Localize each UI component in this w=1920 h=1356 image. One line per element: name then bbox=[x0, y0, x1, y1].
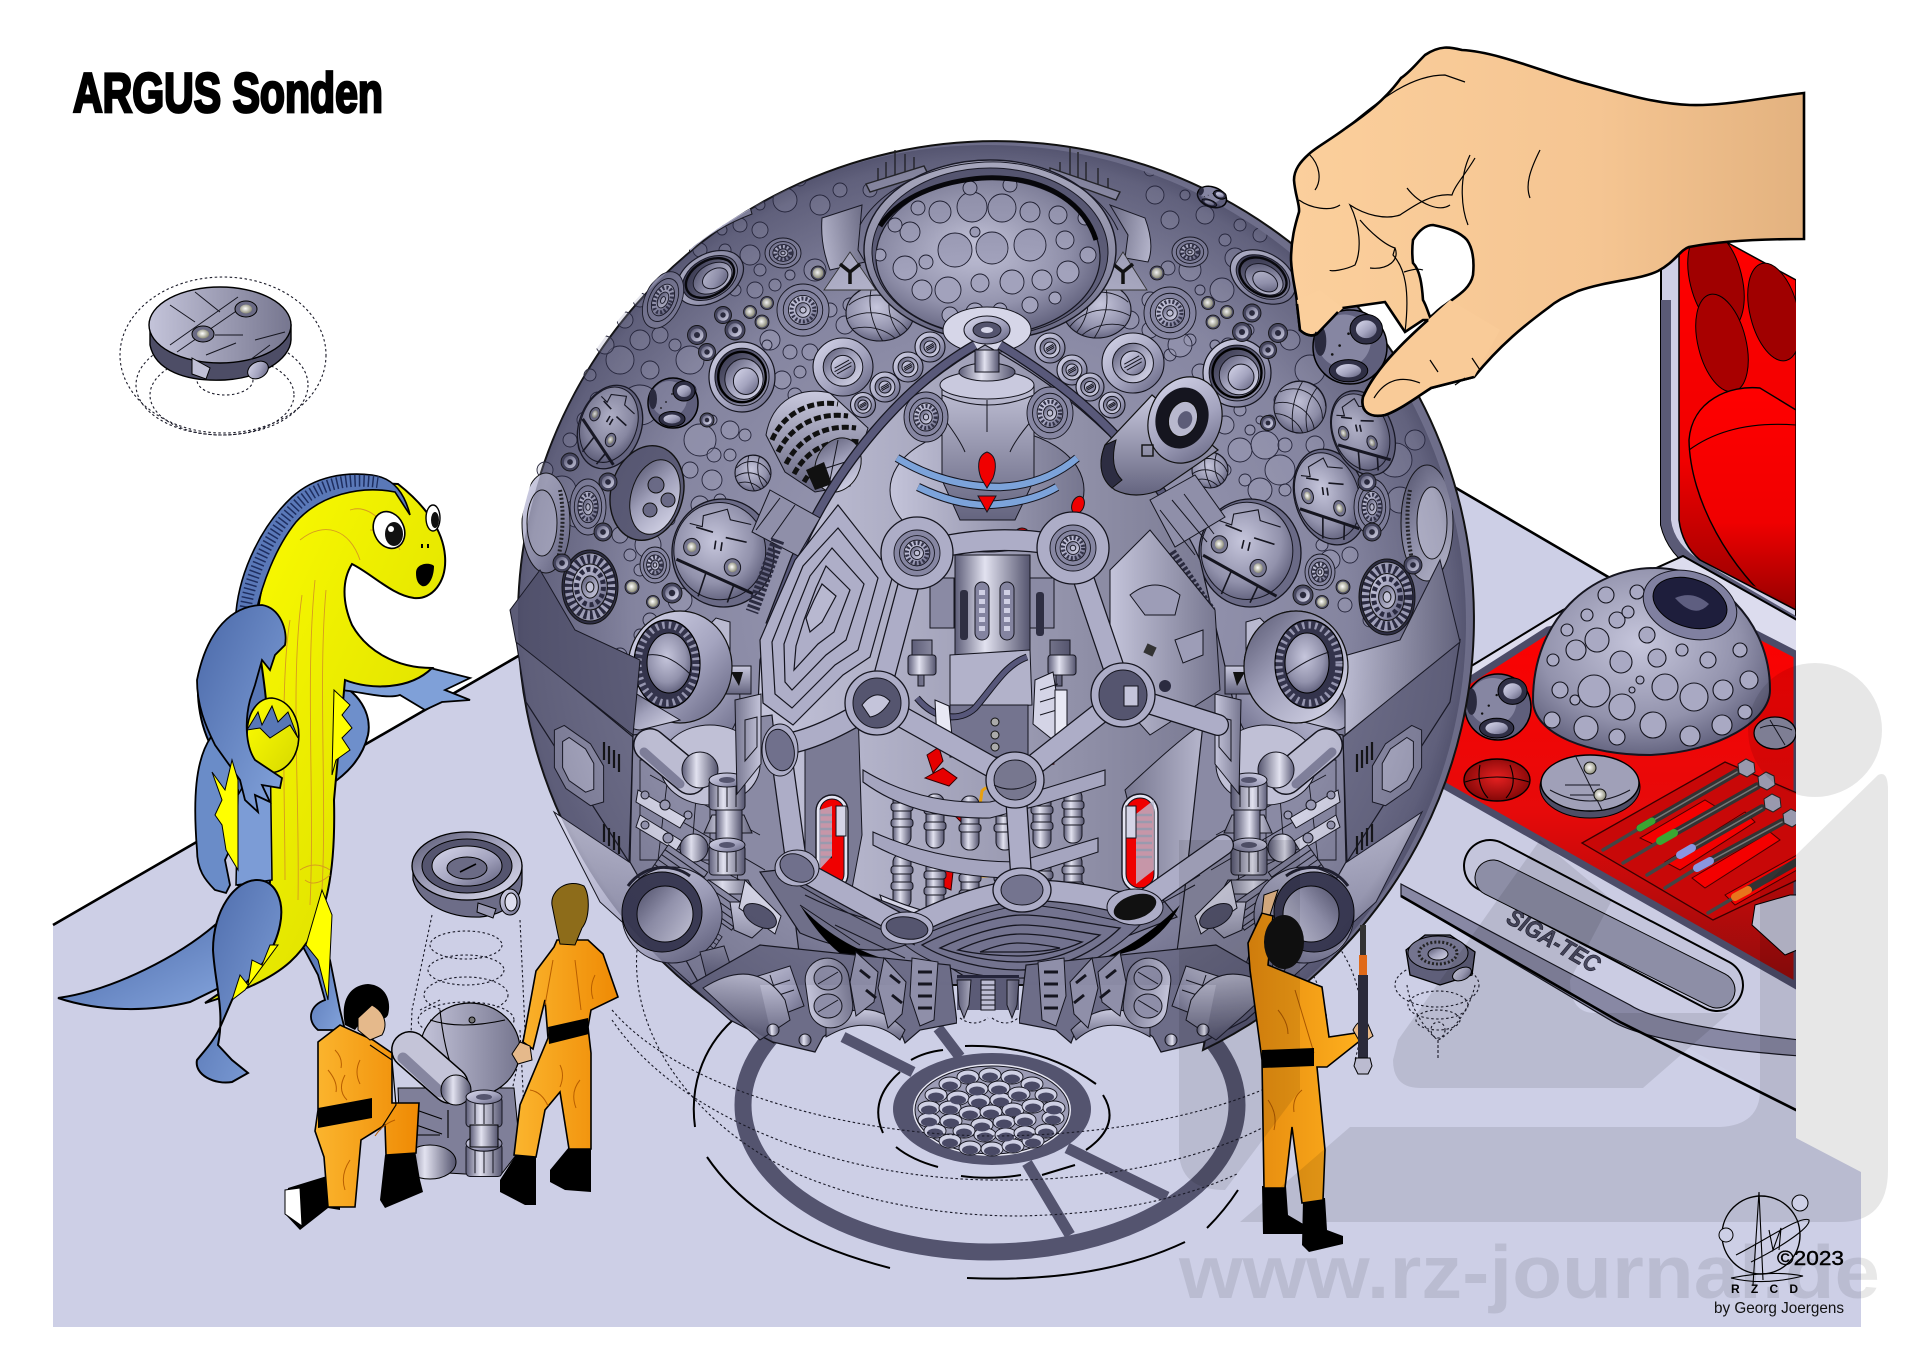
frame hub rings bbox=[762, 512, 1163, 944]
central bell body bbox=[890, 350, 1087, 552]
gear teeth left bbox=[752, 540, 778, 612]
tray slot bbox=[1490, 866, 1717, 990]
hand creases bbox=[1299, 75, 1540, 398]
floor ring with hub bbox=[743, 958, 1237, 1252]
large sockets, dials and lenses bbox=[680, 250, 744, 306]
bead knobs right bbox=[1035, 333, 1164, 418]
case lid bbox=[1660, 242, 1796, 618]
arched band highlight bbox=[770, 345, 1180, 625]
central support frame bbox=[780, 540, 1223, 928]
gear teeth right bbox=[1170, 553, 1210, 612]
tool slots bbox=[1640, 800, 1797, 905]
dotted orbit lines bbox=[612, 935, 1361, 1216]
watermark url: www.rz-journal.de bbox=[1178, 1230, 1880, 1314]
hand forward bbox=[338, 668, 470, 710]
eyes bbox=[367, 505, 440, 554]
thigh yellow jag bbox=[232, 945, 278, 1000]
left ribbed module bbox=[752, 490, 820, 556]
nostrils bbox=[422, 544, 428, 548]
main sphere bbox=[510, 141, 1474, 1101]
hand holding mini probe bbox=[1291, 48, 1804, 416]
sphere body bbox=[518, 141, 1474, 1050]
blue middle strip bbox=[236, 740, 272, 885]
yellow connectors bbox=[980, 786, 1001, 876]
right fairing with red slot bbox=[1122, 719, 1220, 892]
artist signature: by Georg Joergens bbox=[1714, 1300, 1844, 1317]
deep crater bbox=[609, 445, 685, 541]
belly jag bbox=[332, 690, 352, 775]
case tray back rim bbox=[1472, 554, 1796, 674]
yellow body bbox=[205, 484, 445, 1003]
floor arc segments bbox=[694, 1020, 1238, 1279]
finger tip outline bbox=[1297, 304, 1338, 335]
dark small sockets bbox=[553, 266, 1422, 608]
tool rod bbox=[1354, 925, 1372, 1074]
sample probe with dotted path bbox=[120, 277, 326, 435]
tool recess bbox=[1582, 762, 1797, 920]
belly blue bbox=[330, 680, 369, 785]
left fairing with red slot bbox=[805, 710, 862, 910]
jagged yellow trim bbox=[212, 760, 238, 870]
crater field bbox=[522, 164, 1453, 662]
ring probe with dotted coils bbox=[410, 832, 525, 1100]
top opening with dome bbox=[860, 160, 1118, 353]
shoulder blue bbox=[197, 605, 286, 812]
small floor probe bbox=[1395, 935, 1479, 1060]
central column bbox=[908, 555, 1076, 757]
right rim pod bbox=[1194, 182, 1230, 212]
technician with tool bbox=[1248, 890, 1373, 1252]
hand outline bbox=[1291, 48, 1804, 416]
finger tip cover bbox=[1297, 290, 1343, 332]
rear arm bbox=[195, 737, 238, 893]
spare mini probe bbox=[1465, 674, 1531, 740]
tray edge line bbox=[1401, 896, 1800, 1112]
tray surface bbox=[1401, 783, 1797, 1110]
right lens repeat bbox=[1244, 611, 1348, 723]
bead knobs left bbox=[813, 332, 945, 418]
lizard creature bbox=[58, 474, 470, 1083]
tail bbox=[58, 925, 225, 1009]
instrument case bbox=[1401, 200, 1809, 1112]
lower bowl panel bbox=[760, 868, 1200, 981]
fine crater outlines bbox=[530, 164, 1428, 662]
watermark logo bbox=[1179, 663, 1888, 1222]
rim pods bbox=[688, 207, 752, 252]
grey tool block bbox=[1752, 895, 1797, 955]
screwdriver heads bbox=[1738, 759, 1800, 827]
title: ARGUS Sonden bbox=[73, 61, 383, 124]
Y emblems bbox=[824, 252, 876, 290]
right leg bbox=[302, 930, 345, 1030]
artist signature bbox=[1714, 1192, 1844, 1317]
technician standing bbox=[500, 883, 618, 1205]
artist signature: RZCD bbox=[1731, 1282, 1798, 1296]
arm top jag bbox=[247, 706, 298, 738]
arched structural bands bbox=[770, 345, 1180, 625]
ribbed module bbox=[1150, 475, 1225, 555]
floor edge line bbox=[53, 481, 1610, 925]
mouth bbox=[416, 564, 434, 586]
screwdrivers bbox=[1603, 772, 1800, 913]
thigh and foot bbox=[197, 880, 281, 1083]
right grey housing bbox=[1110, 530, 1220, 735]
mane stripes bbox=[245, 481, 378, 612]
lizard leg yellow trim bbox=[306, 890, 332, 1000]
tray strap band bbox=[1401, 884, 1800, 1056]
red internal parts bbox=[925, 747, 1054, 890]
mini probe in fingers bbox=[1313, 310, 1387, 384]
pillars bbox=[891, 789, 1084, 916]
back torso bbox=[198, 604, 290, 885]
top antennas bbox=[866, 147, 1120, 200]
body lines bbox=[284, 509, 400, 905]
thumb outline bbox=[1362, 320, 1474, 416]
engine pod on floor bbox=[398, 1000, 525, 1179]
left and right top panels bbox=[822, 205, 865, 270]
striped cylinder bbox=[766, 391, 870, 500]
shelves bbox=[863, 770, 1105, 940]
hex plate left bbox=[760, 505, 893, 725]
edge canisters bbox=[522, 473, 570, 573]
floor plane bbox=[53, 481, 1861, 1327]
foam cup recess bbox=[1464, 759, 1530, 801]
thumb overlay bbox=[1362, 300, 1500, 416]
underside machinery bbox=[690, 945, 1286, 1052]
upper arm yellow patch bbox=[247, 698, 299, 773]
brand label: SIGA-TEC bbox=[1502, 904, 1605, 979]
large canister bbox=[1101, 366, 1234, 495]
underside central struts bbox=[957, 978, 1019, 1024]
red foam insert bbox=[1438, 600, 1797, 986]
interior cut-away bbox=[757, 345, 1240, 960]
right light shoulder bbox=[1330, 560, 1460, 735]
left dark shoulder bbox=[510, 570, 640, 735]
technician kneeling bbox=[285, 984, 423, 1230]
spare cover disc bbox=[1540, 755, 1640, 818]
artist signature: ©2023 bbox=[1777, 1248, 1844, 1270]
sphere rim shading bbox=[510, 145, 1466, 1101]
cover dome bbox=[1533, 559, 1770, 755]
left and right side machinery bbox=[516, 611, 1460, 992]
small disc bbox=[1754, 717, 1796, 749]
mane bbox=[236, 474, 410, 612]
